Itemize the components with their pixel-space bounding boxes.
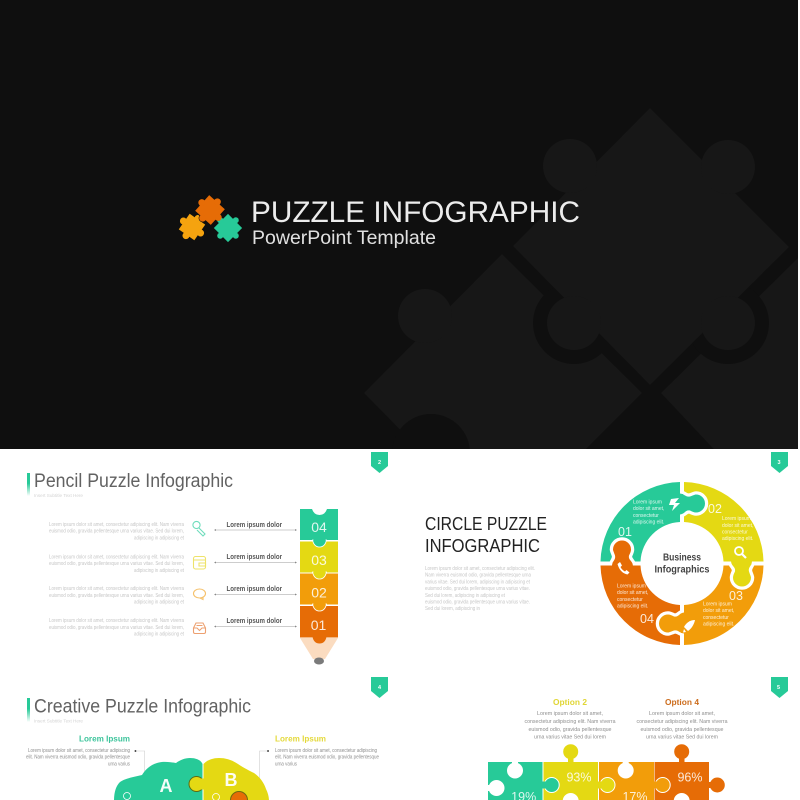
subheading: Insert Subtitle Text Here xyxy=(34,718,83,724)
piece green 19% xyxy=(486,760,542,800)
segment text 03 xyxy=(703,602,734,628)
page tag 3 xyxy=(771,452,788,473)
segment text 02 xyxy=(722,516,753,542)
text block row 03: Lorem ipsum dolor sit amet, consectetur adipiscing elit. Nam viverra xyxy=(49,554,184,560)
option 4 text xyxy=(636,698,728,740)
label and arrow row 04 xyxy=(214,520,297,531)
label and arrow row 01 xyxy=(214,616,297,628)
text block row 04: euismod odio, gravida pellentesque urna varius vitae. Sed dui lorem, xyxy=(49,529,184,535)
piece A xyxy=(114,758,202,800)
option 2 text: euismod odio, gravida pellentesque xyxy=(528,727,612,733)
callout left: Lorem ipsum dolor sit amet, consectetur adipiscing xyxy=(28,748,130,754)
subtitle: PowerPoint Template xyxy=(252,227,436,249)
neck xyxy=(201,778,205,790)
knob green xyxy=(675,490,705,518)
segment text 02: dolor sit amet, xyxy=(722,523,753,529)
centre label: Business xyxy=(663,553,701,564)
segment text 04: dolor sit amet, xyxy=(617,590,648,596)
piece dark orange 96% xyxy=(654,744,725,800)
percentages xyxy=(511,771,703,800)
option 4 text: urna varius vitae Sed dui lorem xyxy=(646,734,718,740)
subheading: Insert Subtitle Text Here xyxy=(34,493,83,499)
panel: options puzzle slide xyxy=(486,677,788,800)
segment text 01: Lorem ipsum xyxy=(633,500,662,506)
icon: rocket xyxy=(683,620,695,632)
piece orange 17% xyxy=(599,760,654,800)
segment text 03: dolor sit amet, xyxy=(703,608,734,614)
heading xyxy=(425,513,547,556)
callout right: urna varius xyxy=(275,762,297,768)
option 2 text xyxy=(524,698,616,740)
callout right: elit. Nam viverra euismod odio, gravida pellentesque xyxy=(275,754,379,760)
callout right xyxy=(260,735,379,781)
segment 03 orange xyxy=(684,566,764,645)
icon: magnifier xyxy=(735,547,746,558)
text block row 04 xyxy=(49,522,185,542)
knob yellow xyxy=(189,776,204,792)
pencil chart xyxy=(300,509,338,664)
callout right: Lorem ipsum dolor sit amet, consectetur adipiscing xyxy=(275,748,377,754)
segment text 01: consectetur xyxy=(633,513,659,519)
callout left: urna varius xyxy=(108,762,130,768)
segment 03 xyxy=(300,542,338,579)
letter B: B xyxy=(224,770,238,790)
callout right: Lorem Ipsum xyxy=(275,735,326,744)
option 4 text: consectetur adipiscing elit. Nam viverra xyxy=(636,719,728,725)
label and arrow row 03: Lorem ipsum dolor xyxy=(226,552,282,561)
segment text 03: Lorem ipsum xyxy=(703,602,732,608)
segment text 04: adipiscing elit. xyxy=(617,604,648,610)
text block row 03 xyxy=(49,554,185,574)
text block: euismod odio, gravida pellentesque urna varius vitae. xyxy=(425,599,530,605)
option 4 text: Option 4 xyxy=(665,698,700,707)
icon: key xyxy=(193,521,205,536)
segment text 04 xyxy=(617,584,648,610)
text block row 02: Lorem ipsum dolor sit amet, consectetur adipiscing elit. Nam viverra xyxy=(49,586,184,592)
icon: bulb B xyxy=(212,794,220,800)
callout left: Lorem Ipsum xyxy=(79,735,130,744)
text block row 01: adipiscing in adipiscing et xyxy=(134,632,185,638)
segment text 03: adipiscing elit. xyxy=(703,622,734,628)
heading: CIRCLE PUZZLE xyxy=(425,513,547,534)
numbers xyxy=(618,502,743,626)
segment 01: 01 xyxy=(311,617,326,633)
brain puzzle chart xyxy=(114,758,269,800)
text block row 02: euismod odio, gravida pellentesque urna varius vitae. Sed dui lorem, xyxy=(49,593,184,599)
segment text 02: adipiscing elit. xyxy=(722,536,753,542)
page tag 2 xyxy=(371,452,388,473)
circle puzzle chart xyxy=(600,482,764,645)
percentages: 96% xyxy=(677,771,703,785)
text block row 01 xyxy=(49,618,185,638)
segment 04: 04 xyxy=(311,519,327,535)
heading: Creative Puzzle Infographic xyxy=(34,697,251,718)
callout left: elit. Nam viverra euismod odio, gravida pellentesque xyxy=(26,754,130,760)
letter A: A xyxy=(160,776,172,796)
label and arrow row 02: Lorem ipsum dolor xyxy=(226,584,282,593)
panel: creative puzzle slide xyxy=(26,677,388,800)
piece B xyxy=(204,758,269,800)
numbers: 03 xyxy=(729,589,743,603)
segment 01 green xyxy=(600,482,680,562)
option 4 text: euismod odio, gravida pellentesque xyxy=(640,727,724,733)
option 4 text: Lorem ipsum dolor sit amet, xyxy=(649,711,715,717)
panel: circle puzzle slide xyxy=(425,452,788,645)
background puzzle silhouette xyxy=(364,108,800,533)
numbers: 02 xyxy=(708,502,722,516)
segment 02 xyxy=(300,574,338,611)
text block: euismod odio, gravida pellentesque urna varius vitae. xyxy=(425,586,530,592)
centre label xyxy=(654,553,710,576)
knob yellow xyxy=(727,556,756,586)
text block: Lorem ipsum dolor sit amet, consectetur adipiscing elit. xyxy=(425,566,535,572)
segment 01 xyxy=(300,606,338,644)
heading: INFOGRAPHIC xyxy=(425,535,540,556)
numbers: 04 xyxy=(640,612,654,626)
knob orange xyxy=(230,792,248,800)
knob orange to dark orange xyxy=(652,778,670,792)
knob dark orange xyxy=(608,540,637,570)
panel: pencil puzzle slide xyxy=(27,452,388,664)
text block row 03: euismod odio, gravida pellentesque urna varius vitae. Sed dui lorem, xyxy=(49,561,184,567)
icon: puzzle logo xyxy=(173,189,248,248)
text block row 04: adipiscing in adipiscing et xyxy=(134,536,185,542)
page tag 3: 3 xyxy=(777,460,781,466)
puzzle row chart xyxy=(486,744,725,800)
option 2 text: urna varius vitae Sed dui lorem xyxy=(534,734,606,740)
page tag 4 xyxy=(371,677,388,698)
text block row 01: Lorem ipsum dolor sit amet, consectetur adipiscing elit. Nam viverra xyxy=(49,618,184,624)
accent bar xyxy=(27,473,30,496)
segment text 01 xyxy=(633,500,664,526)
pencil tip xyxy=(300,638,338,664)
knob orange xyxy=(659,608,689,638)
percentages: 93% xyxy=(566,771,592,785)
accent bar xyxy=(27,698,30,722)
main title: PUZZLE INFOGRAPHIC xyxy=(251,196,580,229)
centre label: Infographics xyxy=(654,565,710,576)
option 2 text: Option 2 xyxy=(553,698,588,707)
text block: varius vitae. Sed dui lorem, adipiscing in adipiscing et xyxy=(425,579,531,585)
segment 02: 02 xyxy=(311,584,327,600)
piece yellow 93% xyxy=(544,744,598,800)
page tag 5 xyxy=(771,677,788,698)
label and arrow row 03 xyxy=(214,552,297,564)
text block: Sed dui lorem, adipiscing in adipiscing et xyxy=(425,593,506,599)
segment 04 dark orange xyxy=(600,566,680,645)
callout left xyxy=(26,735,145,781)
text block row 02: adipiscing in adipiscing et xyxy=(134,600,185,606)
knob green to yellow xyxy=(541,778,559,792)
icon: speech bubble xyxy=(194,589,206,600)
page tag 2: 2 xyxy=(378,460,381,466)
segment text 04: Lorem ipsum xyxy=(617,584,646,590)
segment text 02: Lorem ipsum xyxy=(722,516,751,522)
icon: bulb A xyxy=(124,792,130,800)
segment 02 yellow xyxy=(684,482,764,562)
text block: Sed dui lorem, adipiscing in xyxy=(425,606,480,612)
label and arrow row 02 xyxy=(214,584,297,596)
panel: dark title slide xyxy=(0,0,798,449)
text block xyxy=(425,566,535,612)
segment text 01: adipiscing elit. xyxy=(633,520,664,526)
option 2 text: Lorem ipsum dolor sit amet, xyxy=(537,711,603,717)
page tag 5: 5 xyxy=(777,685,780,691)
text block row 01: euismod odio, gravida pellentesque urna varius vitae. Sed dui lorem, xyxy=(49,625,184,631)
icon: wallet xyxy=(194,556,206,569)
option 2 text: consectetur adipiscing elit. Nam viverra xyxy=(524,719,616,725)
icon: inbox xyxy=(194,623,206,634)
text block: Nam viverra euismod odio, gravida pellentesque urna xyxy=(425,573,531,579)
segment 04 xyxy=(300,509,338,547)
icon: lightning bolt xyxy=(669,498,680,511)
text block row 02 xyxy=(49,586,185,606)
segment text 02: consectetur xyxy=(722,530,748,536)
segment text 01: dolor sit amet, xyxy=(633,506,664,512)
numbers: 01 xyxy=(618,525,632,539)
text block row 03: adipiscing in adipiscing et xyxy=(134,568,185,574)
page tag 4: 4 xyxy=(378,685,382,691)
label and arrow row 04: Lorem ipsum dolor xyxy=(226,520,282,529)
icon: phone xyxy=(618,562,630,574)
text block row 04: Lorem ipsum dolor sit amet, consectetur adipiscing elit. Nam viverra xyxy=(49,522,184,528)
segment text 03: consectetur xyxy=(703,615,729,621)
heading: Pencil Puzzle Infographic xyxy=(34,471,233,492)
knob yellow to orange xyxy=(597,778,615,792)
label and arrow row 01: Lorem ipsum dolor xyxy=(226,616,282,625)
segment text 04: consectetur xyxy=(617,597,643,603)
segment 03: 03 xyxy=(311,552,327,568)
